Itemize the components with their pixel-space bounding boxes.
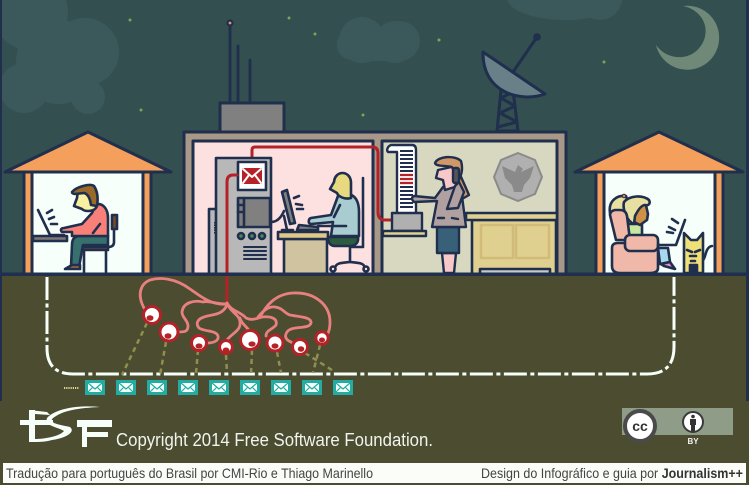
leg — [658, 248, 670, 264]
desk — [33, 236, 67, 241]
mail icon on mainframe — [238, 162, 266, 190]
mainframe screen — [238, 198, 270, 227]
right house — [575, 132, 743, 274]
mainframe computer — [209, 158, 271, 274]
ponytail — [455, 170, 469, 199]
woman in armchair — [610, 194, 685, 273]
shirt — [628, 224, 642, 236]
mail envelopes — [85, 380, 353, 395]
paper printout — [383, 145, 426, 236]
phone — [453, 168, 459, 183]
walls — [596, 172, 723, 274]
icon: Creative Commons badge: cc — [632, 418, 648, 434]
icon: Creative Commons badge: BY — [687, 437, 699, 446]
design credit: Design do Infográfico e guia por Journalism++ — [481, 465, 743, 481]
by mark — [683, 412, 703, 432]
cc mark — [625, 411, 655, 441]
roof — [575, 132, 743, 172]
head — [74, 190, 97, 211]
dashed wiretap links — [122, 323, 335, 375]
shoe — [65, 265, 80, 269]
monitor and desk — [271, 190, 328, 274]
face — [634, 201, 648, 225]
red cable into ground — [227, 175, 237, 304]
dish tower — [497, 90, 518, 131]
hair — [72, 185, 98, 206]
hair bun — [610, 196, 632, 216]
chair — [84, 229, 114, 273]
chair — [335, 178, 365, 268]
rooftop box — [220, 103, 284, 132]
wiretap eyes — [144, 306, 328, 354]
head — [330, 173, 351, 199]
copyright text: Copyright 2014 Free Software Foundation. — [116, 430, 433, 450]
room — [604, 172, 715, 274]
hair — [435, 157, 462, 181]
eagle — [502, 165, 534, 192]
dotted data trail — [64, 387, 79, 389]
tentacles — [140, 279, 330, 343]
torso — [309, 194, 359, 236]
woman on phone — [412, 157, 469, 273]
moon — [656, 6, 719, 70]
office worker — [309, 173, 368, 272]
antennas — [228, 20, 250, 102]
icon: FSF logo — [20, 406, 112, 447]
cable under ground — [47, 277, 674, 374]
shelf — [383, 231, 426, 236]
red cable between rooms — [252, 147, 392, 220]
laptop — [38, 210, 64, 235]
dish bowl — [483, 52, 545, 97]
armchair arm — [625, 235, 658, 251]
grey room — [382, 141, 557, 274]
icon: Creative Commons badge — [622, 408, 733, 446]
man with laptop — [33, 185, 117, 273]
central building — [184, 132, 566, 274]
ground — [0, 274, 749, 485]
skirt — [437, 227, 459, 253]
filing cabinet — [466, 213, 557, 274]
dish arm — [513, 37, 537, 72]
trousers — [71, 236, 108, 267]
grumpy cat — [684, 233, 712, 273]
legs — [442, 253, 456, 273]
mainframe lights — [238, 233, 265, 239]
clouds — [0, 0, 623, 114]
credits bar — [3, 463, 746, 483]
trousers — [328, 237, 358, 246]
ground line — [0, 272, 749, 276]
translation credit: Tradução para português do Brasil por CMI-Rio e Thiago Marinello — [6, 465, 373, 481]
government seal — [494, 153, 542, 201]
room — [32, 172, 143, 274]
pink room — [193, 141, 373, 274]
roof — [5, 132, 171, 172]
laptop — [658, 219, 685, 245]
night sky — [0, 0, 749, 274]
torso — [61, 204, 108, 236]
left house — [5, 132, 171, 274]
jacket — [412, 186, 466, 227]
hair — [624, 196, 650, 224]
walls — [24, 172, 151, 274]
face — [436, 166, 458, 190]
raised arm — [447, 182, 464, 209]
armchair base — [612, 243, 658, 273]
satellite dish — [483, 33, 545, 131]
stars — [128, 16, 606, 116]
printer — [392, 213, 422, 231]
armchair back — [610, 210, 630, 240]
